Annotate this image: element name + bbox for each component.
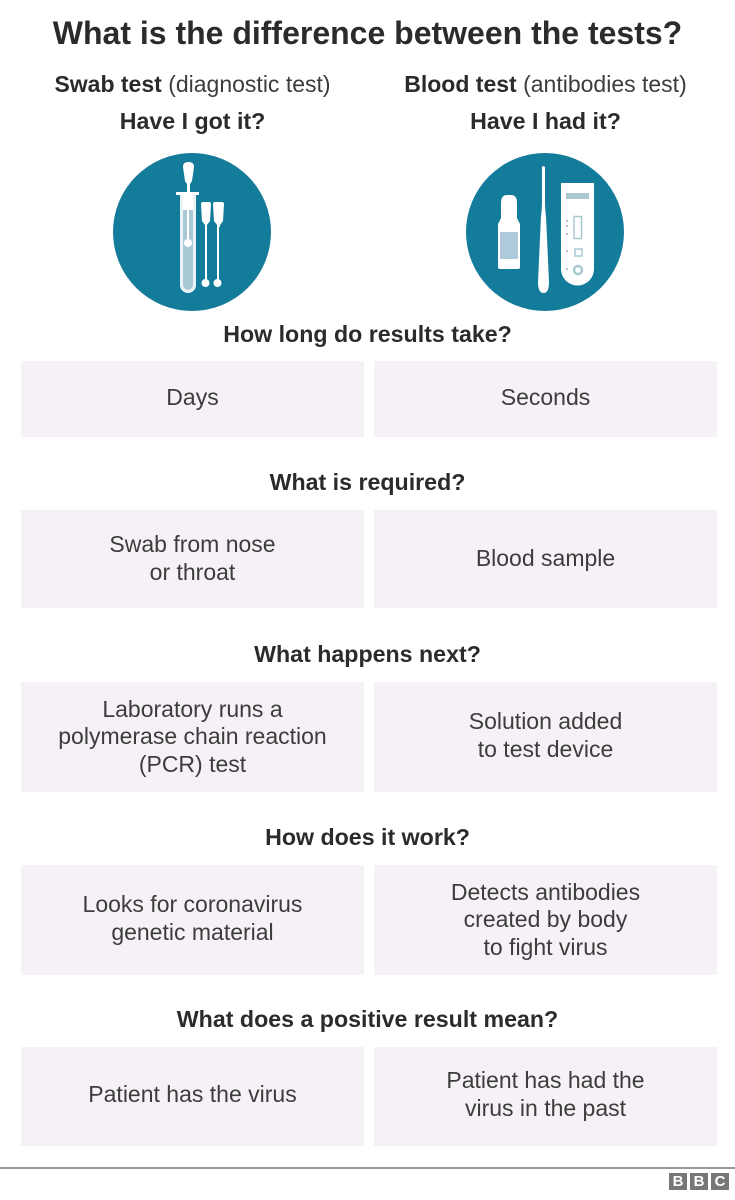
- panel: swab sample: or throat: [150, 559, 235, 585]
- panel: solution added: [374, 682, 717, 792]
- panel: has the virus: [21, 1047, 364, 1146]
- panel: detects antibodies: [374, 865, 717, 975]
- heading: how it works: How does it work?: [265, 824, 470, 850]
- panel: laboratory PCR: Laboratory runs a: [102, 696, 283, 722]
- icon: swab test tube and swabs: [113, 153, 271, 311]
- panel: has the virus: Patient has the virus: [88, 1081, 297, 1107]
- panel: genetic material: Looks for coronavirus: [83, 891, 302, 917]
- swab test heading: Swab test (diagnostic test): [54, 71, 331, 97]
- title: What is the difference between the tests?: [53, 15, 682, 51]
- BBC logo: C: [715, 1173, 725, 1190]
- panel: laboratory PCR: (PCR) test: [139, 751, 246, 777]
- panel: solution added: to test device: [478, 736, 613, 762]
- panel: blood sample: Blood sample: [476, 545, 615, 571]
- panel: solution added: Solution added: [469, 708, 622, 734]
- panel: blood sample: [374, 510, 717, 608]
- panel: days: [21, 361, 364, 437]
- BBC logo: B: [694, 1173, 704, 1190]
- panel: laboratory PCR: [21, 682, 364, 792]
- swab question: Have I got it?: [120, 108, 265, 134]
- blood question: Have I had it?: [470, 108, 621, 134]
- panel: detects antibodies: Detects antibodies: [451, 879, 640, 905]
- heading: results time: How long do results take?: [223, 321, 512, 347]
- panel: laboratory PCR: polymerase chain reaction: [58, 723, 327, 749]
- BBC logo: [669, 1173, 729, 1190]
- panel: swab sample: Swab from nose: [109, 531, 276, 557]
- heading: next steps: What happens next?: [254, 641, 481, 667]
- panel: detects antibodies: to fight virus: [483, 934, 607, 960]
- icon: antibody test kit: [466, 153, 624, 311]
- panel: genetic material: genetic material: [111, 919, 274, 945]
- panel: had the virus: [374, 1047, 717, 1146]
- panel: days: Days: [166, 384, 219, 410]
- panel: had the virus: Patient has had the: [446, 1067, 645, 1093]
- heading: requirements: What is required?: [270, 469, 465, 495]
- BBC logo: B: [673, 1173, 683, 1190]
- panel: swab sample: [21, 510, 364, 608]
- footer rule: [0, 1167, 735, 1169]
- panel: detects antibodies: created by body: [464, 906, 627, 932]
- panel: seconds: [374, 361, 717, 437]
- blood test heading: Blood test (antibodies test): [404, 71, 687, 97]
- heading: positive result: What does a positive result mean?: [177, 1006, 558, 1032]
- panel: genetic material: [21, 865, 364, 975]
- panel: had the virus: virus in the past: [465, 1094, 626, 1120]
- panel: seconds: Seconds: [501, 384, 590, 410]
